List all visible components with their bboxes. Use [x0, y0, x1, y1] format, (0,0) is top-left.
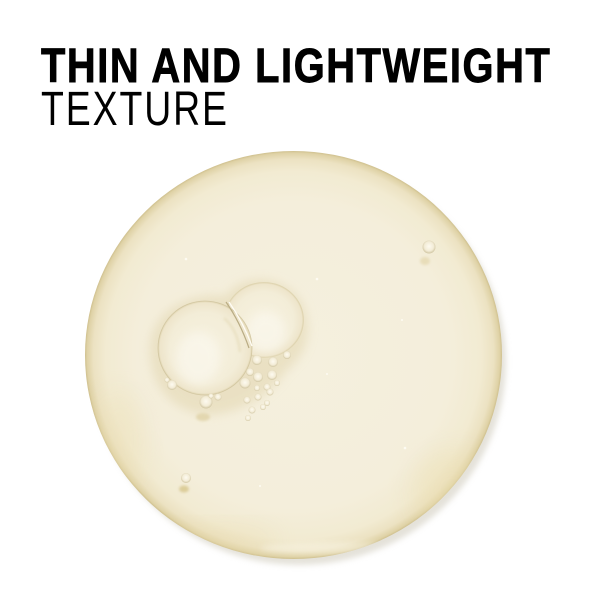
small bubble cluster	[164, 351, 291, 421]
right bubble	[224, 282, 304, 358]
double bubble	[150, 280, 308, 415]
heading: bold line: THIN AND LIGHTWEIGHT	[41, 40, 550, 93]
droplet: lower left	[179, 473, 191, 492]
small shadow under bubbles	[196, 413, 210, 421]
title	[41, 40, 550, 136]
heading: light line: TEXTURE	[41, 83, 227, 136]
serum pool	[85, 151, 506, 565]
left bubble	[158, 301, 252, 395]
droplet: upper right	[420, 240, 436, 265]
bubble seam	[226, 302, 249, 348]
tiny specks	[185, 258, 406, 487]
infographic canvas	[41, 48, 550, 567]
